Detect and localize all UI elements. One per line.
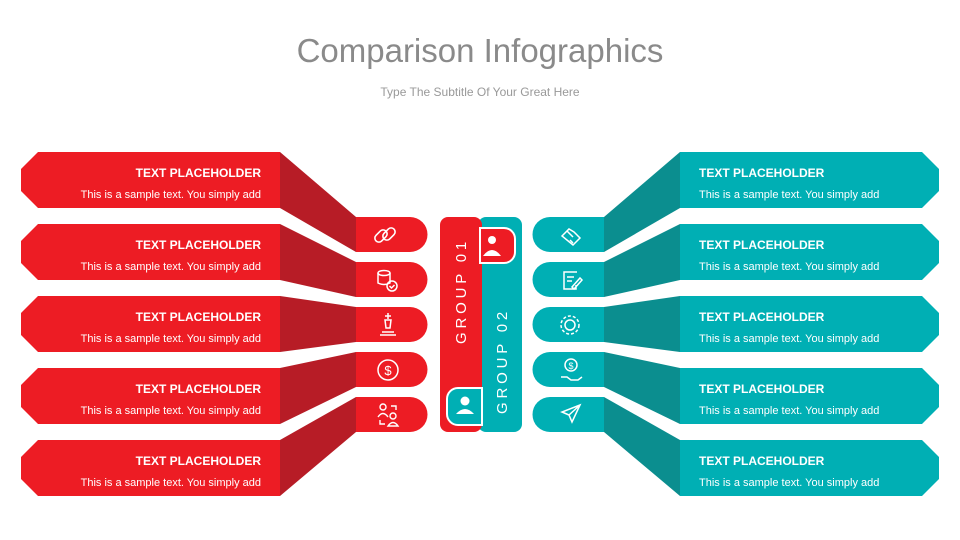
subtitle: Type The Subtitle Of Your Great Here (380, 85, 580, 99)
row right 5: This is a sample text. You simply add (699, 477, 879, 489)
row right 4: This is a sample text. You simply add (699, 405, 879, 417)
panel: left group red (21, 152, 428, 496)
row right 2: TEXT PLACEHOLDER (699, 238, 825, 252)
row left 2 (21, 224, 427, 297)
row left 3: This is a sample text. You simply add (81, 333, 261, 345)
row right 2 (533, 224, 939, 297)
panel: right group teal (532, 152, 939, 496)
row right 1: TEXT PLACEHOLDER (699, 166, 825, 180)
row right 5 (532, 397, 939, 496)
row left 4: $ (384, 363, 392, 378)
row left 1: TEXT PLACEHOLDER (136, 166, 261, 180)
row right 2: This is a sample text. You simply add (699, 261, 879, 273)
row left 2: TEXT PLACEHOLDER (136, 238, 261, 252)
row left 3: TEXT PLACEHOLDER (136, 310, 261, 324)
row right 3 (532, 296, 939, 352)
row left 5: TEXT PLACEHOLDER (136, 454, 261, 468)
row left 4: This is a sample text. You simply add (81, 405, 261, 417)
label: group 01: GROUP 01 (453, 238, 470, 344)
row right 5: TEXT PLACEHOLDER (699, 454, 825, 468)
row right 4: TEXT PLACEHOLDER (699, 382, 825, 396)
row right 4 (532, 352, 939, 424)
label: group 02: GROUP 02 (494, 308, 511, 414)
row right 1: This is a sample text. You simply add (699, 189, 879, 201)
row left 4: TEXT PLACEHOLDER (136, 382, 261, 396)
row right 3: This is a sample text. You simply add (699, 333, 879, 345)
panel: center group labels (440, 217, 522, 432)
row left 1 (21, 152, 428, 252)
row left 4 (21, 352, 428, 424)
row left 5: This is a sample text. You simply add (81, 477, 261, 489)
row left 2: This is a sample text. You simply add (81, 261, 261, 273)
row left 1: This is a sample text. You simply add (81, 189, 261, 201)
title: Comparison Infographics (297, 32, 663, 69)
icon: group 02 person (447, 388, 482, 425)
row left 5 (21, 397, 428, 496)
row right 4: $ (568, 361, 574, 371)
row right 1 (532, 152, 939, 252)
icon: group 01 person (480, 228, 515, 263)
row right 3: TEXT PLACEHOLDER (699, 310, 825, 324)
row left 3 (21, 296, 428, 352)
